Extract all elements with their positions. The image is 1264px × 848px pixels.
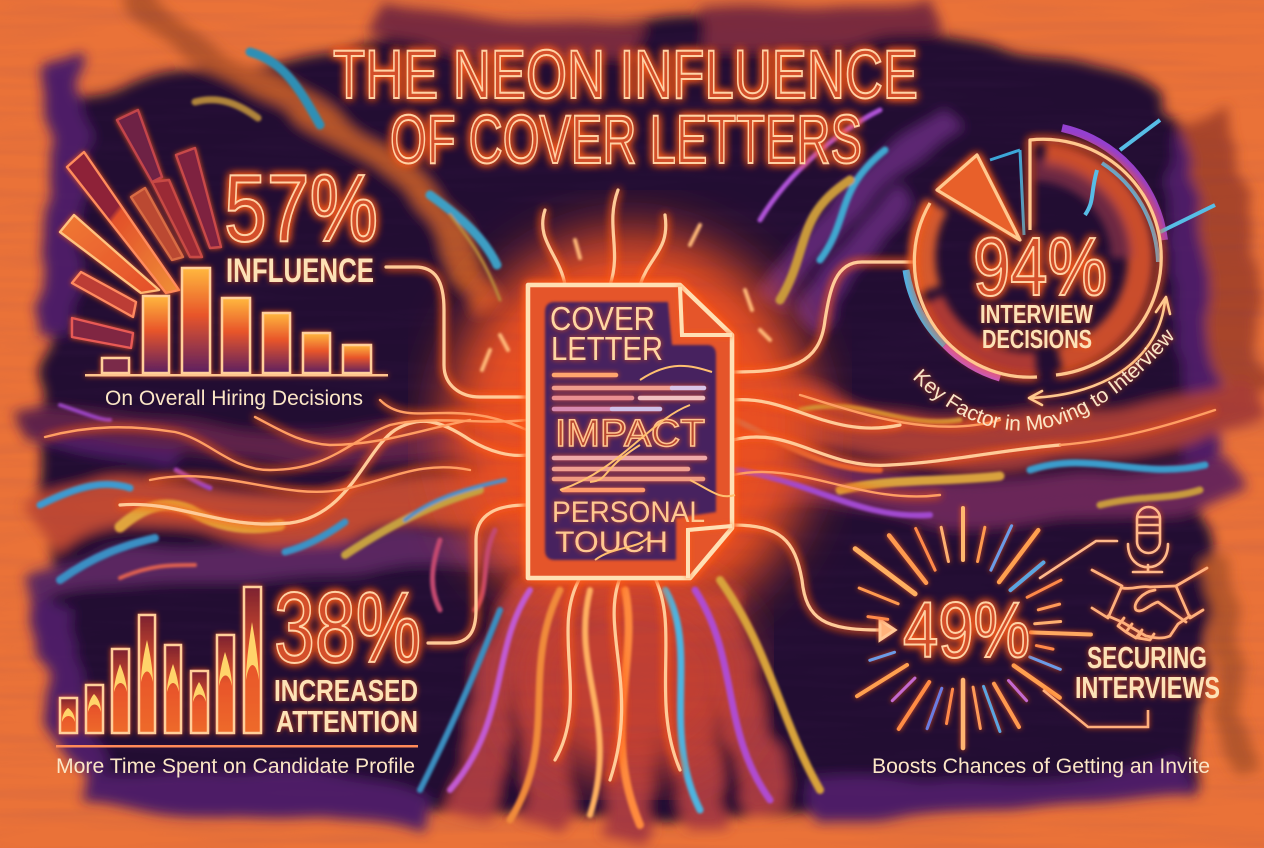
stat 38%: 38% (274, 572, 421, 684)
stat 49%: 49% (903, 585, 1030, 674)
curved arrow (1029, 297, 1170, 405)
stat 94%: 94% (973, 220, 1107, 313)
heading: cover letter: LETTER (551, 330, 663, 367)
caption: Boosts Chances of Getting an Invite (872, 755, 1210, 778)
word: personal touch (552, 496, 705, 559)
ring chart (906, 120, 1215, 378)
bar chart (60, 587, 261, 733)
text lines (554, 375, 705, 490)
label influence: INFLUENCE (226, 252, 374, 290)
label interview decisions: INTERVIEW (980, 299, 1093, 329)
heading: cover letter (550, 300, 663, 367)
title: THE NEON INFLUENCE (333, 36, 918, 113)
central document (528, 285, 735, 578)
panel: 38% attention (56, 572, 421, 778)
title: OF COVER LETTERS (390, 101, 862, 178)
caption: On Overall Hiring Decisions (105, 387, 363, 410)
starburst (855, 508, 1091, 748)
title (333, 36, 918, 178)
word: personal touch: TOUCH (555, 526, 668, 559)
word: personal touch: PERSONAL (552, 496, 705, 529)
label interview decisions: DECISIONS (982, 324, 1092, 354)
curved caption: Key Factor in Moving to Interview (910, 328, 1176, 432)
document page (528, 285, 732, 578)
word: impact: IMPACT (555, 413, 705, 455)
label increased attention: INCREASED (274, 673, 418, 708)
stat 57%: 57% (224, 155, 378, 262)
heading: cover letter: COVER (550, 300, 655, 337)
label securing interviews: INTERVIEWS (1075, 670, 1220, 705)
panel: 57% influence (60, 110, 388, 410)
icon: handshake (1092, 568, 1207, 640)
fan chart rays (60, 110, 221, 348)
label securing interviews (1075, 640, 1220, 705)
panel: 49% securing interviews (855, 507, 1220, 778)
label securing interviews: SECURING (1087, 640, 1207, 675)
icon: microphone (1040, 507, 1168, 578)
label interview decisions (980, 299, 1093, 354)
connector wires (45, 190, 1215, 780)
bar chart (85, 268, 388, 376)
arrow into burst (880, 620, 895, 640)
caption: More Time Spent on Candidate Profile (56, 755, 415, 778)
label increased attention: ATTENTION (276, 704, 418, 739)
panel: 94% interview decisions (902, 118, 1216, 432)
label increased attention (274, 673, 418, 739)
